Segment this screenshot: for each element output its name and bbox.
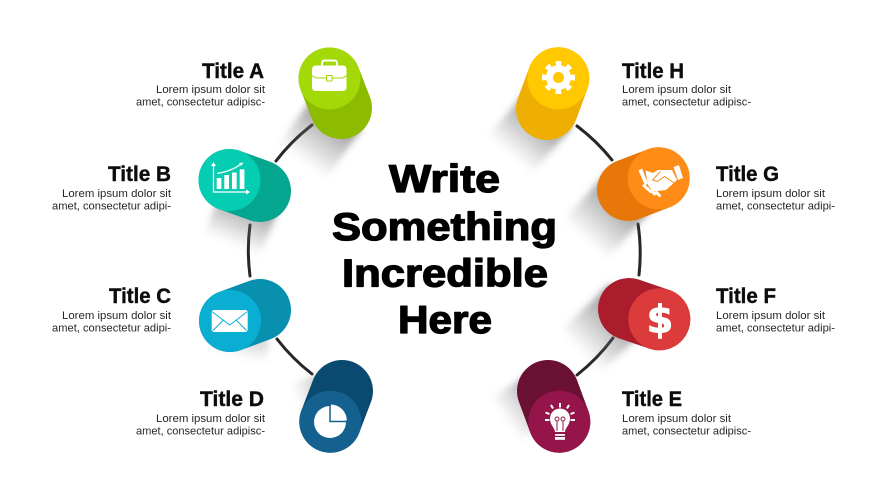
connecting arc: G to F — [638, 224, 640, 275]
text: Title D: Lorem ipsum dolor sit — [156, 413, 265, 425]
icon: light bulb — [545, 403, 575, 440]
text: Title D — [136, 388, 265, 438]
shadow A — [302, 112, 338, 162]
connecting arc: F to E — [577, 338, 613, 375]
text: Title H: amet, consectetur adipisc- — [622, 96, 751, 108]
shadow D — [298, 395, 325, 405]
capsule D — [299, 391, 361, 453]
item E — [505, 388, 751, 453]
text: Title G: amet, consectetur adipi- — [716, 200, 835, 212]
text: Title C — [52, 285, 171, 334]
text: Title B: Title B — [108, 163, 171, 186]
text: Title C: Lorem ipsum dolor sit — [62, 310, 171, 322]
capsule E — [528, 391, 590, 453]
icon: envelope — [212, 310, 248, 332]
central heading: Something — [332, 206, 557, 249]
icon: dollar sign: $ — [647, 298, 673, 342]
text: Title F: Title F — [716, 285, 776, 308]
text: Title A: amet, consectetur adipisc- — [136, 96, 265, 108]
text: Title A: Title A — [202, 60, 264, 83]
shadow B — [232, 200, 250, 245]
icon: gear — [544, 64, 572, 92]
shadow H — [510, 108, 550, 155]
text: Title G — [716, 163, 835, 212]
text: Title A — [136, 60, 265, 108]
connecting arc: H to G — [577, 126, 612, 160]
item H — [510, 47, 751, 155]
text: Title H — [622, 60, 751, 108]
central heading: Incredible — [342, 252, 548, 296]
connecting arc: B to C — [248, 225, 250, 276]
capsule B — [198, 149, 260, 211]
shadow E — [505, 392, 545, 420]
text: Title E — [622, 388, 751, 438]
item D — [136, 388, 361, 453]
icon: bar chart — [211, 162, 250, 194]
shadow C — [240, 335, 245, 358]
text: Title H: Title H — [622, 60, 684, 83]
shadow G — [585, 190, 630, 240]
text: Title E: Title E — [622, 388, 682, 411]
text: Title E: Lorem ipsum dolor sit — [622, 413, 731, 425]
icon: pie chart — [314, 404, 347, 438]
central heading: Write — [389, 158, 500, 201]
item F — [580, 285, 835, 352]
text: Title G: Lorem ipsum dolor sit — [716, 188, 825, 200]
text: Title D: Title D — [200, 388, 264, 411]
text: Title C: Title C — [109, 285, 171, 308]
text: Title H: Lorem ipsum dolor sit — [622, 84, 731, 96]
text: Title F: amet, consectetur adipi- — [716, 322, 835, 334]
text: Title A: Lorem ipsum dolor sit — [156, 84, 265, 96]
text: Title F — [716, 285, 835, 334]
text: Title E: amet, consectetur adipisc- — [622, 426, 751, 438]
text: Title G: Title G — [716, 163, 779, 186]
icon: briefcase — [312, 60, 346, 91]
item C — [52, 285, 261, 358]
central heading: Here — [398, 299, 492, 342]
connecting arc: C to D — [277, 339, 312, 374]
item B — [52, 149, 260, 245]
text: Title F: Lorem ipsum dolor sit — [716, 310, 825, 322]
connecting arc: A to B — [276, 125, 312, 161]
text: Title D: amet, consectetur adipisc- — [136, 426, 265, 438]
icon: handshake — [638, 165, 683, 196]
text: Title B — [52, 163, 171, 212]
capsule G — [628, 147, 690, 209]
text: Title C: amet, consectetur adipi- — [52, 322, 171, 334]
capsule F — [628, 288, 690, 350]
item G — [585, 147, 835, 240]
capsule C — [199, 290, 261, 352]
item A — [136, 48, 360, 162]
text: Title B: amet, consectetur adipi- — [52, 200, 171, 212]
central heading — [332, 158, 557, 342]
text: Title B: Lorem ipsum dolor sit — [62, 188, 171, 200]
capsule A — [298, 48, 360, 110]
capsule H — [527, 47, 589, 109]
shadow F — [580, 305, 630, 352]
